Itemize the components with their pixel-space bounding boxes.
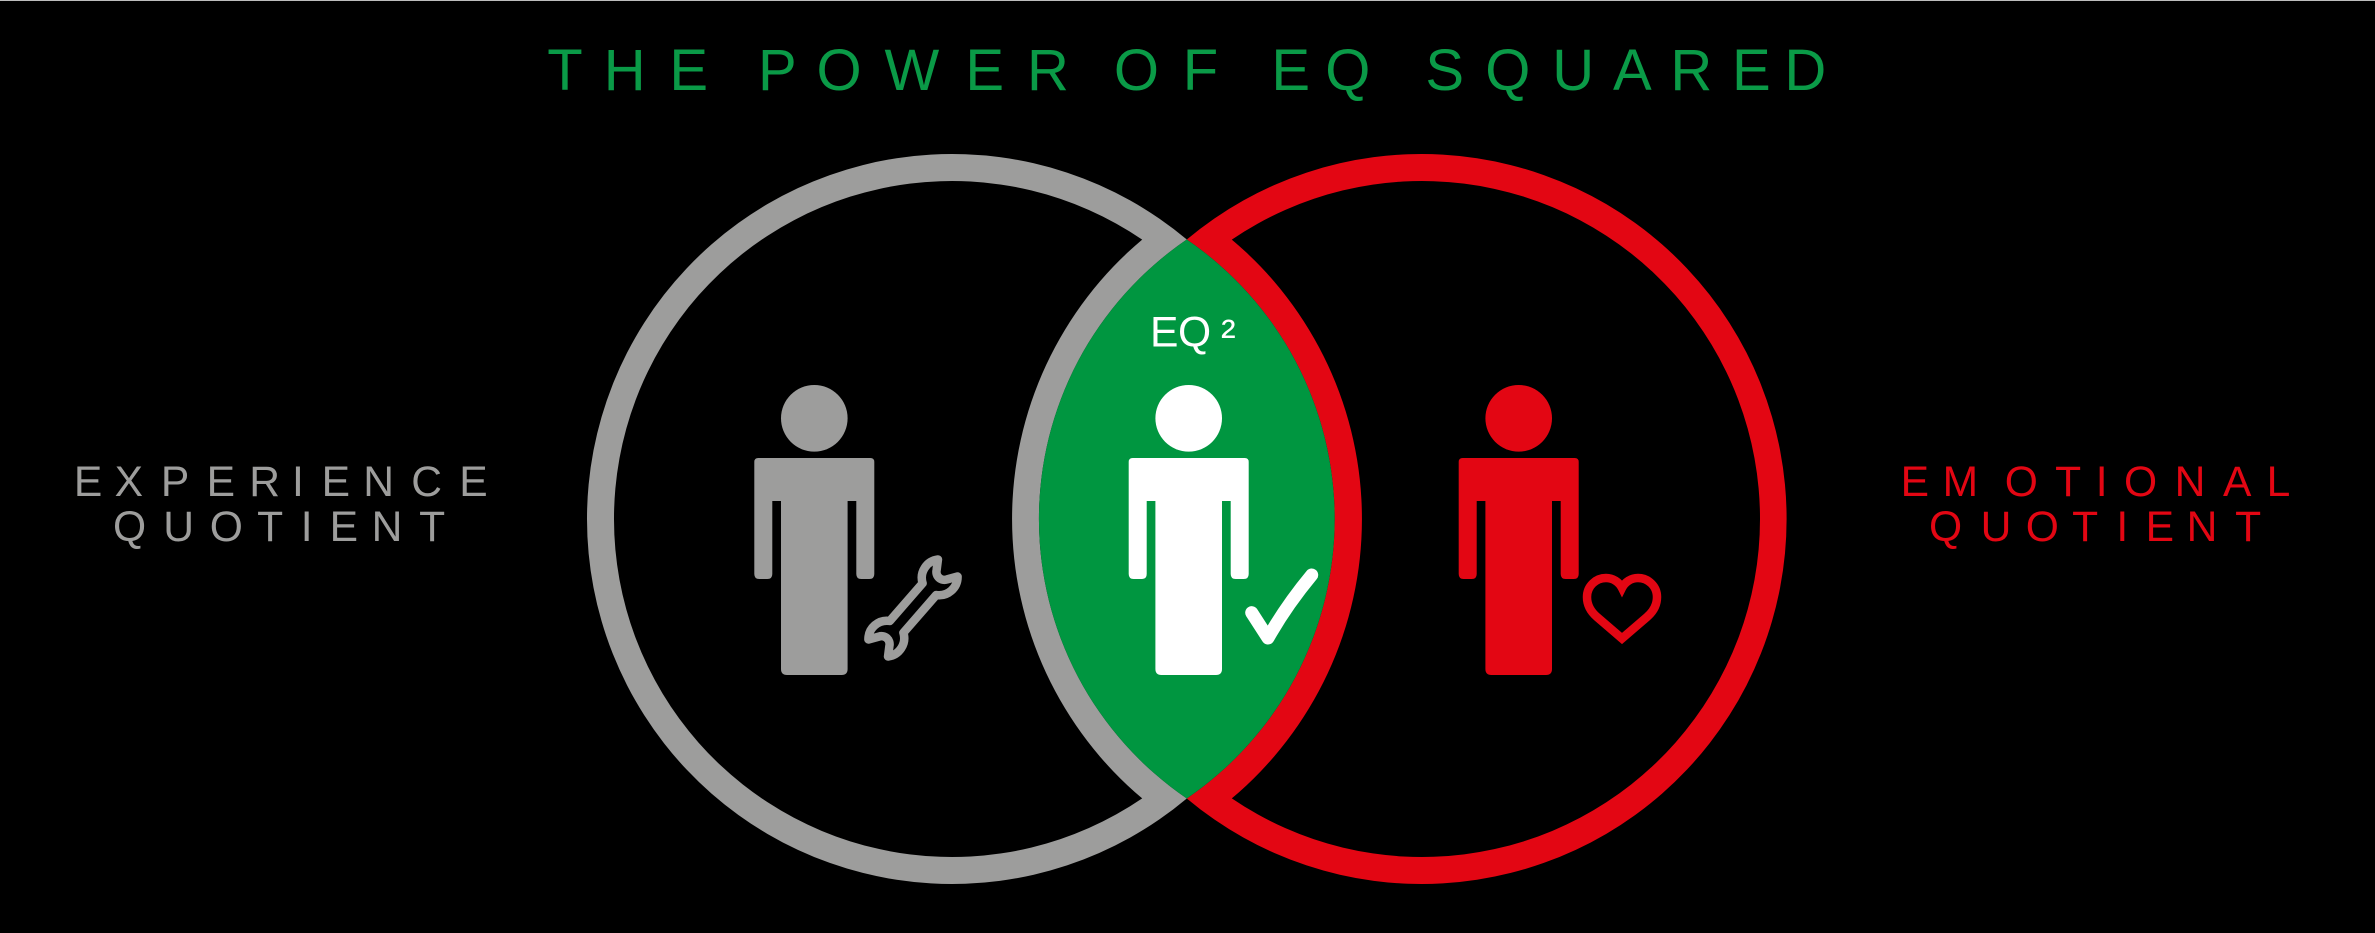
- icon: grey person: [754, 385, 874, 675]
- title: THE POWER OF EQ SQUARED: [547, 38, 1826, 103]
- icon: white person: [1129, 385, 1249, 675]
- icon: check mark: [1252, 575, 1312, 638]
- EQ squared label: EQ: [1150, 309, 1211, 357]
- label: emotional quotient: EMOTIONAL: [1901, 458, 2290, 506]
- icon: wrench: [865, 556, 961, 660]
- green overlap: [1039, 240, 1335, 798]
- label: emotional quotient: [1901, 458, 2290, 551]
- EQ squared label: ²: [1221, 311, 1236, 360]
- label: experience quotient: [74, 458, 488, 551]
- label: experience quotient: EXPERIENCE: [74, 458, 488, 506]
- red circle outline: [1187, 154, 1787, 884]
- icon: heart: [1587, 578, 1657, 638]
- icon: red person: [1459, 385, 1579, 675]
- label: emotional quotient: QUOTIENT: [1929, 503, 2261, 551]
- label: experience quotient: QUOTIENT: [113, 503, 445, 551]
- grey circle outline: [587, 154, 1187, 884]
- venn diagram: [587, 154, 1787, 884]
